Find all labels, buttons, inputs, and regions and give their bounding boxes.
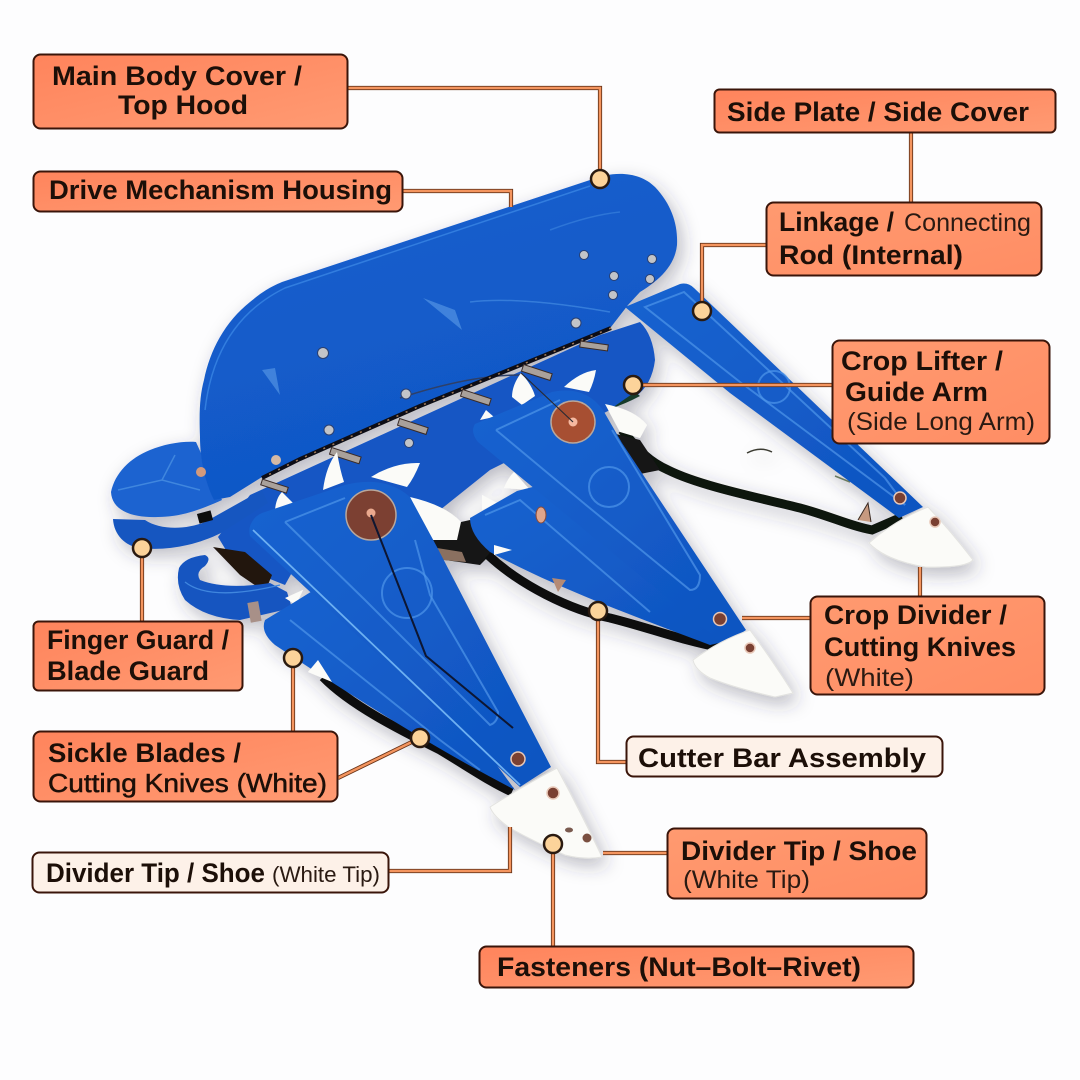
label: linkage [766, 202, 1042, 276]
label: drive mechanism housing: Drive Mechanism Housing [49, 175, 392, 205]
label: fasteners: Fasteners (Nut–Bolt–Rivet) [497, 952, 861, 982]
cutter bar body [111, 322, 655, 585]
white sickle blades [275, 370, 647, 540]
connector: main body cover [348, 88, 600, 179]
label: crop lifter: Guide Arm [845, 377, 988, 407]
label: side plate: Side Plate / Side Cover [727, 97, 1029, 127]
hood bolts [196, 250, 656, 477]
connector: crop lifter [633, 383, 832, 387]
illustration: reaper harvester attachment [111, 174, 973, 858]
knife chain and clips [261, 328, 611, 493]
connector: side plate [909, 133, 913, 202]
left upper hook [111, 442, 222, 517]
left lower hook [113, 490, 268, 549]
label: divider tip right: (White Tip) [683, 866, 810, 894]
connector: cutter bar [598, 611, 626, 762]
label: linkage: Rod (Internal) [779, 240, 963, 270]
label: fasteners [480, 946, 914, 988]
front rear panel and blade rail [264, 580, 515, 792]
label: drive mechanism housing [34, 172, 402, 212]
connector: divider tip right [603, 851, 667, 855]
label: crop lifter: (Side Long Arm) [847, 408, 1035, 436]
label: crop lifter: Crop Lifter / [841, 346, 1004, 376]
label: divider tip left [32, 852, 388, 892]
callout dots [133, 170, 711, 853]
label: divider tip right [668, 828, 926, 898]
dark drive clusters between panels [425, 430, 660, 565]
label: sickle blades [34, 732, 338, 802]
label: main body cover [34, 54, 348, 128]
connector: crop divider [742, 567, 920, 618]
front crop divider panel [249, 482, 602, 858]
connector: finger guard [140, 548, 144, 621]
label: cutter bar assembly: Cutter Bar Assembly [638, 743, 926, 773]
label: divider tip left: (White Tip) [272, 862, 380, 887]
connector: sickle blades [293, 658, 420, 778]
connector: drive mechanism housing [403, 191, 511, 207]
label: main body cover: Top Hood [118, 90, 248, 120]
label: finger guard [34, 622, 242, 690]
label: finger guard: Blade Guard [47, 656, 209, 686]
label: divider tip left: Divider Tip / Shoe [46, 858, 265, 888]
label: crop lifter [832, 340, 1050, 444]
connector: linkage [702, 245, 766, 311]
label: cutter bar assembly [626, 736, 942, 776]
label: side plate [714, 90, 1056, 132]
label: sickle blades: Sickle Blades / [48, 738, 242, 768]
label: crop divider: (White) [825, 664, 914, 692]
label: crop divider [810, 596, 1044, 694]
connector: fasteners [551, 844, 555, 946]
middle rear panel and blade rail [470, 480, 723, 648]
front hooks [178, 547, 303, 623]
label: sickle blades: Cutting Knives (White) [48, 768, 327, 798]
label: crop divider: Cutting Knives [824, 632, 1016, 662]
label: linkage: Linkage / [779, 207, 894, 237]
main body cover hood [196, 174, 677, 500]
right crop lifter arm [622, 284, 973, 567]
middle crop divider panel [473, 373, 793, 697]
label: linkage: Connecting [904, 209, 1031, 237]
label: main body cover: Main Body Cover / [52, 61, 303, 91]
label: crop divider: Crop Divider / [824, 600, 1008, 630]
connector: divider tip left [389, 827, 510, 871]
label: divider tip right: Divider Tip / Shoe [681, 836, 917, 866]
label: finger guard: Finger Guard / [47, 625, 229, 655]
